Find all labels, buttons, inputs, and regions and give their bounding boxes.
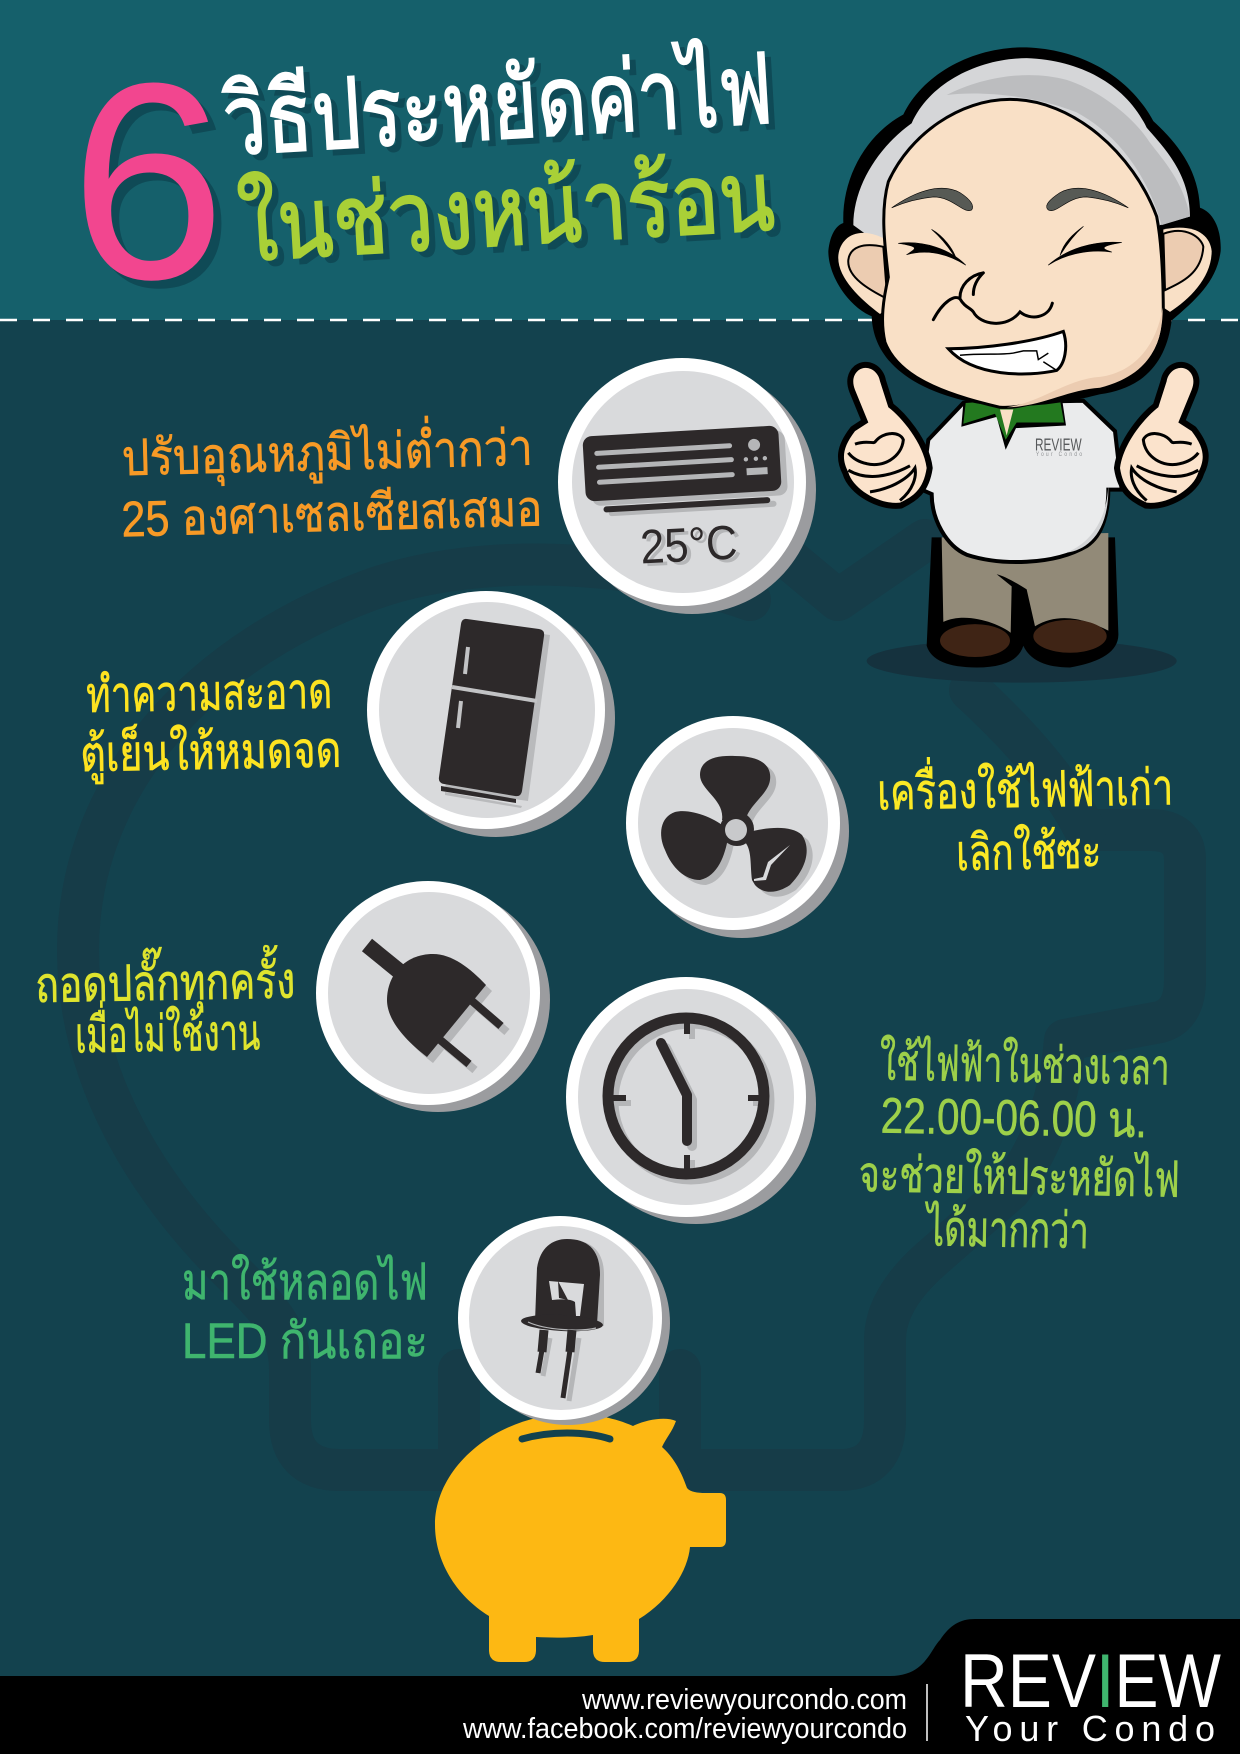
mascot: pants and shoes [927, 533, 1118, 667]
mascot: eyebrows [892, 188, 1128, 211]
title [70, 26, 784, 346]
mascot: head outline [828, 47, 1221, 406]
piggy bank slot [522, 1433, 610, 1439]
mascot character [828, 47, 1221, 683]
mascot: left hand thumbs up [844, 368, 927, 503]
title: number 6: 6 [70, 26, 226, 338]
footer: divider [926, 1684, 928, 1741]
icon: fridge coin [367, 591, 615, 837]
icon: fan coin [626, 716, 849, 938]
icon: clock coin [566, 977, 816, 1224]
tip 5 text: off-peak hours [857, 1034, 1182, 1261]
mascot: shirt: Your Condo [1036, 451, 1082, 458]
tip 4 text: unplug [35, 944, 297, 1064]
footer: website links: www.reviewyourcondo.com [581, 1684, 907, 1716]
tip 4 text: unplug: เมื่อไม่ใช้งาน [75, 998, 261, 1064]
tip 3 text: old appliances: เลิกใช้ซะ [956, 823, 1102, 881]
icon: air conditioner coin [558, 358, 816, 614]
mascot: grin [948, 331, 1066, 374]
piggy bank [435, 1414, 726, 1662]
icon: plug coin [316, 881, 550, 1112]
tip 5 text: off-peak hours: 22.00-06.00 น. [880, 1088, 1147, 1148]
footer: logo: REVIEW [960, 1639, 1221, 1724]
header band [0, 0, 1240, 320]
tip 1 text: temperature: 25 องศาเซลเซียสเสมอ [121, 480, 543, 547]
footer: website links: www.facebook.com/reviewyourcondo [462, 1713, 907, 1745]
tip 5 text: off-peak hours: ได้มากกว่า [924, 1200, 1089, 1259]
title: line 2: ในช่วงหน้าร้อน [241, 146, 784, 288]
tip 6 text: LED [182, 1254, 428, 1369]
icon label: 25°C: 25°C [639, 516, 739, 574]
tip 6 text: LED: มาใช้หลอดไฟ [182, 1254, 428, 1310]
title: line 1: วิธีประหยัดค่าไฟ [220, 34, 775, 176]
icon label: 25°C: 25°C [643, 519, 743, 577]
mascot: chin shading [1007, 308, 1163, 407]
tip 3 text: old appliances [877, 753, 1175, 883]
mascot: closed eyes [898, 226, 1122, 265]
mascot: shirt: REVIEW [1035, 436, 1082, 455]
tip 2 text: fridge [79, 663, 342, 784]
tip 4 text: unplug: ถอดปลั๊กทุกครั้ง [35, 944, 296, 1015]
mascot: nose [933, 273, 1052, 323]
footer bar [0, 1619, 1240, 1754]
mascot: ears [838, 228, 1212, 314]
title: line 2: ในช่วงหน้าร้อน [235, 140, 777, 282]
icon: LED coin [458, 1216, 670, 1425]
tip 2 text: fridge: ตู้เย็นให้หมดจด [80, 720, 342, 784]
mascot: right hand thumbs up [1120, 368, 1203, 503]
mascot: hair [853, 58, 1190, 290]
tip 1 text: temperature [119, 413, 543, 547]
mascot: ground shadow [867, 639, 1177, 683]
tip 6 text: LED: LED กันเถอะ [182, 1313, 428, 1369]
mascot: face [883, 99, 1163, 407]
dashed divider [0, 319, 1240, 321]
title: line 1: วิธีประหยัดค่าไฟ [226, 39, 782, 182]
footer: website links [462, 1684, 907, 1745]
footer: logo: Your Condo [965, 1708, 1215, 1749]
background: lightbulb watermark [78, 540, 1185, 1470]
title: number 6: 6 [78, 34, 234, 346]
tip 2 text: fridge: ทำความสะอาด [86, 663, 333, 723]
tip 1 text: temperature: ปรับอุณหภูมิไม่ต่ำกว่า [121, 414, 533, 488]
mascot: shirt [922, 396, 1122, 562]
